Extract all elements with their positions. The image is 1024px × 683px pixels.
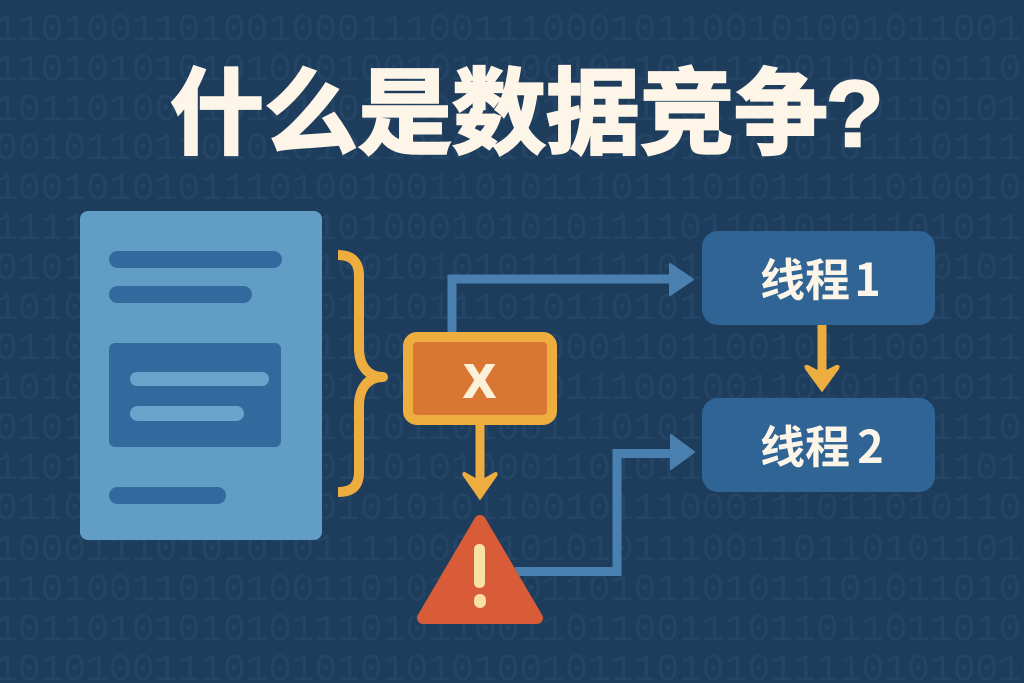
arrow: X to warning bbox=[462, 425, 498, 500]
icon: warning triangle bbox=[423, 521, 537, 618]
arrow: X to thread 1 bbox=[452, 264, 693, 334]
arrow: thread 1 to thread 2 bbox=[804, 325, 840, 392]
arrow: warning to thread 2 bbox=[515, 435, 694, 572]
document line 2 bbox=[109, 286, 252, 303]
document line 3 bbox=[109, 487, 226, 504]
variable x box: X bbox=[464, 355, 495, 407]
highlighted code block bbox=[109, 343, 281, 447]
panel: document with shared data bbox=[80, 211, 322, 540]
box: thread 1 bbox=[702, 231, 935, 325]
document line 1 bbox=[109, 251, 282, 268]
brace bbox=[338, 255, 383, 492]
variable x box bbox=[408, 337, 552, 420]
box: thread 2: 线程 2 bbox=[760, 411, 884, 476]
title: 什么是数据竞争 bbox=[170, 61, 828, 166]
title: ? bbox=[826, 61, 883, 166]
box: thread 2 bbox=[702, 398, 935, 492]
box: thread 1: 线程 1 bbox=[760, 244, 881, 309]
